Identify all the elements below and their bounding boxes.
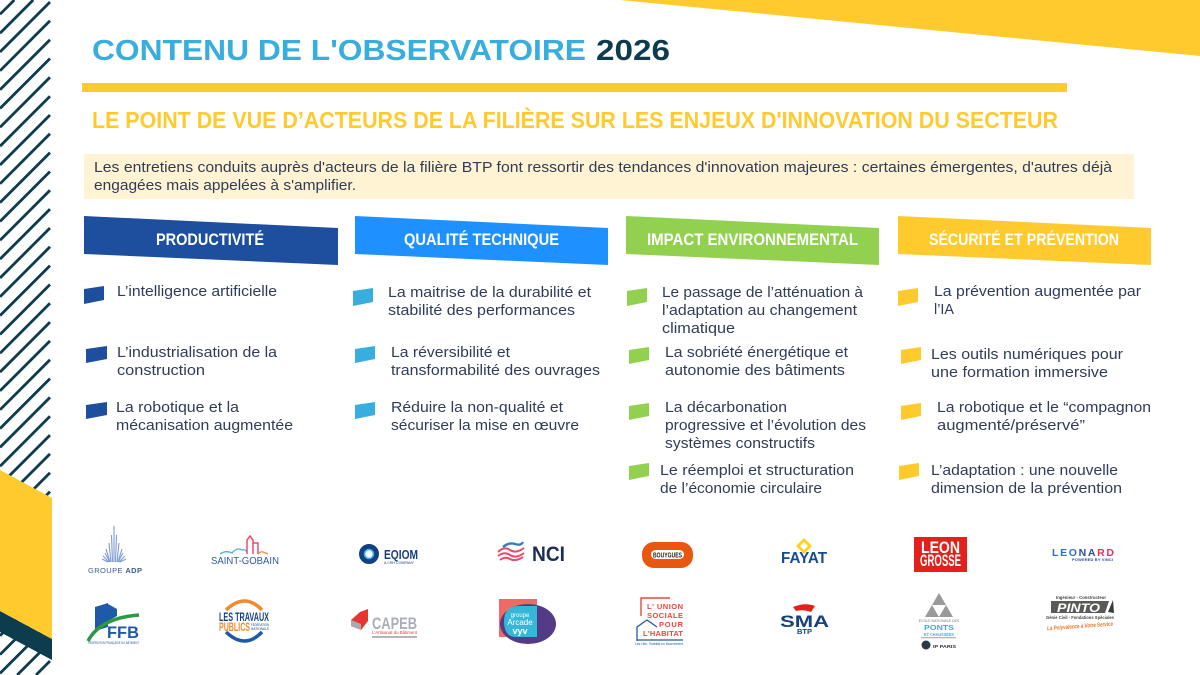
decorative block: bottom-left yellow and navy [0,470,52,660]
logo: École des Ponts: ET CHAUSSÉES [924,630,954,637]
logo: Léon Grosse: LEON [921,538,960,557]
intro text block: Les entretiens conduits auprès d'acteurs de la filière BTP font ressortir des tendances d'innovation majeures : certaines émergentes, d'autres déjà [94,159,1113,176]
logo: FFB: FÉDÉRATION FRANÇAISE DU BÂTIMENT [88,640,140,645]
logo: SMA BTP [780,604,829,636]
panel: sécurité et prévention [898,216,1151,497]
item: durabilité: stabilité des performances [388,302,575,319]
title: 2026 [596,35,670,67]
logo: Union Sociale pour l'Habitat: SOCIALE [647,611,683,620]
item: décarbonation: progressive et l’évolution des [665,417,866,434]
item: réversibilité: La réversibilité et [391,344,511,361]
heading: qualité technique [355,216,608,265]
item: industrialisation [86,344,278,379]
item: compagnon augmenté: La robotique et le “compagnon [937,399,1151,416]
heading: sécurité et prévention [898,216,1151,265]
logo: Groupe Arcade VYV: vyv [512,626,528,636]
item: adaptation au changement climatique: Le passage de l’atténuation à [662,284,864,301]
item: outils numériques: une formation immersive [931,364,1108,381]
item: adaptation au changement climatique: l’adaptation au changement [662,302,858,319]
item: robotique [86,399,293,434]
logo: Pinto [1046,595,1114,632]
item: adaptation prévention: dimension de la prévention [931,480,1122,497]
logo: Union Sociale pour l'Habitat: L'HABITAT [643,629,683,638]
logo: Léon Grosse: GROSSE [920,551,961,570]
logo: Pinto: La Polyvalence à Votre Service [1047,622,1114,632]
title: CONTENU DE L'OBSERVATOIRE [92,35,586,67]
logo: Groupe ADP: GROUPE ADP [88,566,142,575]
logo: FFB [88,603,140,645]
item: sobriété énergétique [629,344,849,379]
logo: SMA BTP: BTP [797,629,812,636]
logo: Saint-Gobain [211,536,279,567]
logo: Union Sociale pour l'Habitat: POUR [659,620,684,629]
logo: Union Sociale pour l'Habitat: Les Hlm, l'habitat en Mouvement [635,642,683,646]
item: intelligence artificielle: L’intelligence artificielle [117,283,277,300]
logo: Les Travaux Publics: FÉDÉRATION [251,622,269,627]
item: outils numériques: Les outils numériques pour [931,346,1123,363]
item: décarbonation: La décarbonation [665,399,787,416]
logo: NCI: NCI [532,543,565,566]
logo: NCI [498,542,565,566]
logo: Les Travaux Publics [219,601,270,641]
logo: CAPEB [351,609,418,638]
item: réemploi [629,462,854,497]
item: réemploi: de l’économie circulaire [660,480,822,497]
item: réemploi: Le réemploi et structuration [660,462,854,479]
logo: Union Sociale pour l'Habitat [635,598,684,646]
item: outils numériques [901,346,1123,381]
decorative wedge: top-right yellow [620,0,1200,56]
intro text block [84,154,1134,199]
item: adaptation au changement climatique [627,284,864,337]
item: compagnon augmenté: augmenté/préservé” [937,417,1085,434]
item: non-qualité [355,399,579,434]
logo: École des Ponts: ÉCOLE NATIONALE DES [919,618,960,623]
heading: impact environnemental [626,216,879,265]
logo: Pinto: PINTO [1057,601,1101,615]
logo: Groupe ADP [88,526,142,575]
logo: Eqiom: EQIOM [384,547,418,562]
logo: Leonard: POWERED BY VINCI [1072,557,1113,562]
logo: École des Ponts [919,593,960,650]
item: industrialisation: construction [117,362,205,379]
item: prévention IA: l’IA [934,301,954,318]
item: décarbonation: systèmes constructifs [665,435,815,452]
item: non-qualité: Réduire la non-qualité et [391,399,564,416]
item: robotique: mécanisation augmentée [116,417,293,434]
item: industrialisation: L’industrialisation de la [117,344,278,361]
panel: qualité technique [353,216,608,434]
heading: sécurité et prévention: SÉCURITÉ ET PRÉVENTION [929,230,1119,249]
logo: Groupe Arcade VYV: groupe [511,613,530,619]
item: robotique: La robotique et la [116,399,240,416]
logo: Les Travaux Publics: PUBLICS [219,620,250,634]
logo: Leonard: LEONARD [1052,547,1114,559]
logo: CAPEB: L'Artisanat du Bâtiment [372,630,418,635]
item: sobriété énergétique: La sobriété énergétique et [665,344,849,361]
logo: Eqiom: A CRH COMPANY [384,560,414,565]
item: adaptation au changement climatique: climatique [662,320,735,337]
item: réversibilité [355,344,600,379]
logo: Eqiom [362,546,418,565]
logo: Saint-Gobain: SAINT-GOBAIN [211,555,279,567]
logo: Léon Grosse [914,537,967,572]
heading: impact environnemental: IMPACT ENVIRONNEMENTAL [647,230,858,249]
logo: Les Travaux Publics: NATIONALE [251,627,270,631]
heading: productivité [84,216,338,265]
logo: SMA BTP: SMA [780,612,829,631]
logo: Les Travaux Publics: LES TRAVAUX [219,610,269,624]
subtitle: LE POINT DE VUE D’ACTEURS DE LA FILIÈRE SUR LES ENJEUX D'INNOVATION DU SECTEUR [92,106,1058,133]
item: décarbonation [629,399,866,452]
logo: CAPEB: CAPEB [372,614,417,633]
logo: Groupe Arcade VYV: Arcade [507,618,533,627]
panel: impact environnemental [626,216,879,497]
item: adaptation prévention [899,462,1122,497]
logo: Pinto: Génie Civil - Fondations Spéciales [1046,615,1114,621]
logo: Fayat [781,538,828,567]
item: compagnon augmenté [901,399,1151,434]
item: réversibilité: transformabilité des ouvrages [391,362,600,379]
panel: productivité [84,216,338,434]
logo: École des Ponts: IP PARIS [933,644,957,650]
item: durabilité: La maitrise de la durabilité et [388,284,592,301]
logo: Pinto: Ingénieur - Constructeur [1056,595,1106,601]
item: sobriété énergétique: autonomie des bâtiments [665,362,845,379]
item: adaptation prévention: L’adaptation : une nouvelle [931,462,1118,479]
logo: FFB: FFB [107,623,139,642]
item: prévention IA [898,283,1141,318]
logo: École des Ponts: PONTS [924,623,954,632]
item: non-qualité: sécuriser la mise en œuvre [391,417,579,434]
decorative stripes: left edge [0,0,50,675]
logo: Groupe Arcade VYV [499,599,556,644]
heading: qualité technique: QUALITÉ TECHNIQUE [404,230,559,249]
logo: Fayat: FAYAT [781,550,828,567]
item: intelligence artificielle [84,283,277,304]
logo: Union Sociale pour l'Habitat: L' UNION [647,602,683,611]
item: prévention IA: La prévention augmentée par [934,283,1141,300]
item: durabilité [353,284,592,319]
logo: Bouygues: BOUYGUES [653,552,682,560]
title underline bar [82,83,1067,92]
logo: Bouygues [642,542,693,568]
heading: productivité: PRODUCTIVITÉ [156,230,264,249]
intro text block: engagées mais appelées à s'amplifier. [94,177,356,194]
